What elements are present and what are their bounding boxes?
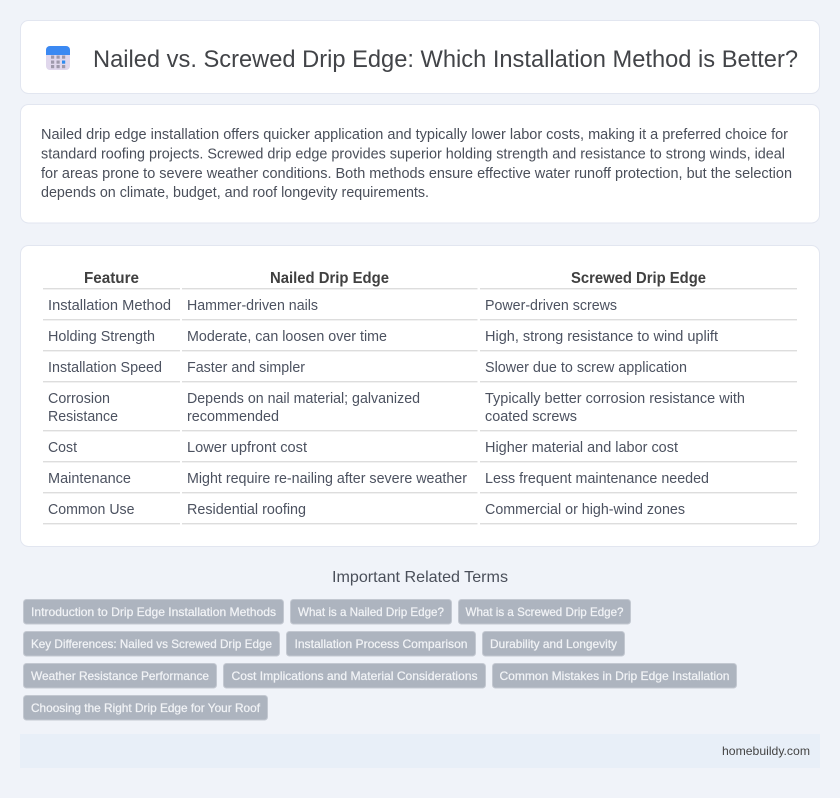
tag	[24, 632, 280, 656]
text block: introduction paragraph: depends on climate, budget, and roof longevity requirements.	[41, 185, 429, 201]
row: holding strength: Moderate, can loosen over time	[187, 329, 387, 345]
icon: calendar	[46, 46, 70, 70]
row: installation method	[48, 298, 617, 314]
heading: important related terms: Important Related Terms	[332, 569, 508, 586]
row: corrosion resistance: Depends on nail material; galvanized	[187, 391, 420, 407]
row: installation method: Hammer-driven nails	[187, 298, 318, 314]
panel: introduction	[20, 104, 820, 223]
row: installation speed: Installation Speed	[48, 360, 162, 376]
tag: Cost Implications and Material Considerations	[232, 669, 478, 683]
row: corrosion resistance: recommended	[187, 409, 279, 425]
tag: What is a Nailed Drip Edge?	[298, 605, 444, 619]
row: maintenance: Less frequent maintenance needed	[485, 471, 709, 487]
tag	[24, 664, 216, 688]
row: holding strength: Holding Strength	[48, 329, 155, 345]
row: holding strength	[48, 329, 718, 345]
footer	[20, 734, 820, 768]
row: installation method: Power-driven screws	[485, 298, 617, 314]
tag: Weather Resistance Performance	[31, 669, 209, 683]
row: common use	[48, 502, 685, 518]
footer: homebuildy.com	[722, 744, 810, 758]
row: holding strength: High, strong resistance to wind uplift	[485, 329, 718, 345]
text block: introduction paragraph: Nailed drip edge installation offers quicker application and typically lower labor costs, making it a preferred choice for	[41, 127, 788, 143]
row: cost	[48, 440, 678, 456]
table header row: Screwed Drip Edge	[571, 270, 706, 287]
table header row: Nailed Drip Edge	[270, 270, 389, 287]
panel: title header	[20, 20, 820, 94]
row: cost: Higher material and labor cost	[485, 440, 678, 456]
table header row	[84, 270, 706, 287]
tag: Common Mistakes in Drip Edge Installation	[500, 669, 730, 683]
row: installation speed: Faster and simpler	[187, 360, 305, 376]
tag: What is a Screwed Drip Edge?	[466, 605, 624, 619]
tag: Durability and Longevity	[490, 637, 617, 651]
row: installation speed	[48, 360, 687, 376]
tag	[286, 632, 476, 656]
row: maintenance: Maintenance	[48, 471, 131, 487]
row: installation speed: Slower due to screw application	[485, 360, 687, 376]
row: common use: Common Use	[48, 502, 134, 518]
tag: Key Differences: Nailed vs Screwed Drip Edge	[31, 637, 272, 651]
tag: Choosing the Right Drip Edge for Your Roof	[31, 701, 261, 715]
panel: comparison table	[20, 246, 820, 546]
row: corrosion resistance: Resistance	[48, 409, 118, 425]
tag: Introduction to Drip Edge Installation Methods	[31, 605, 276, 619]
title: Nailed vs. Screwed Drip Edge: Which Installation Method is Better?	[93, 46, 798, 73]
row: corrosion resistance	[48, 391, 745, 425]
row: common use: Residential roofing	[187, 502, 306, 518]
tag	[24, 696, 268, 720]
related terms tags	[24, 600, 736, 720]
text block: introduction paragraph	[41, 127, 792, 201]
text block: introduction paragraph: standard roofing projects. Screwed drip edge provides superior holding strength and resistance to strong winds, ideal	[41, 146, 785, 162]
row: cost: Lower upfront cost	[187, 440, 307, 456]
row: corrosion resistance: coated screws	[485, 409, 577, 425]
tag	[224, 664, 486, 688]
tag: Installation Process Comparison	[294, 637, 468, 651]
row: installation method: Installation Method	[48, 298, 171, 314]
row: maintenance	[48, 471, 709, 487]
tag	[24, 600, 284, 624]
row: corrosion resistance: Corrosion	[48, 391, 110, 407]
tag	[290, 600, 452, 624]
row: cost: Cost	[48, 440, 77, 456]
row: corrosion resistance: Typically better corrosion resistance with	[485, 391, 745, 407]
tag	[458, 600, 630, 624]
tag	[482, 632, 624, 656]
tag	[492, 664, 736, 688]
row: common use: Commercial or high-wind zones	[485, 502, 685, 518]
row: maintenance: Might require re-nailing after severe weather	[187, 471, 467, 487]
text block: introduction paragraph: for areas prone to severe weather conditions. Both methods ensure effective water runoff protection, but the selection	[41, 166, 792, 182]
table header row: Feature	[84, 270, 139, 287]
